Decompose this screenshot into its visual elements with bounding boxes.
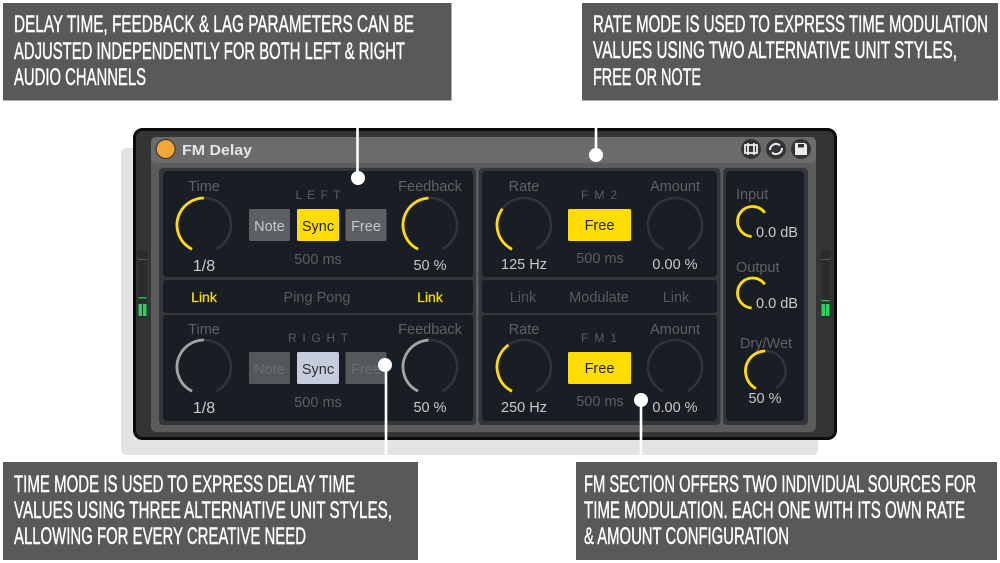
button: Sync active: Sync: [302, 362, 334, 378]
callout: delay parameters: DELAY TIME, FEEDBACK & LAG PARAMETERS CAN BE: [14, 11, 414, 38]
modulation section backing: [478, 168, 720, 425]
heading: FM 2: F M 2: [581, 188, 617, 202]
callout: time mode: TIME MODE IS USED TO EXPRESS DELAY TIME: [14, 471, 355, 498]
knob: FM 1 rate: [488, 331, 560, 403]
device frame: [134, 130, 836, 438]
heading: FM 1: F M 1: [581, 331, 617, 345]
button: Note dimmed: [249, 352, 290, 384]
device name: FM Delay: [182, 142, 253, 159]
meter: right output: [821, 250, 830, 318]
knob: FM 2 rate: [488, 189, 560, 261]
button: Free: [568, 352, 631, 384]
icon: refresh: [766, 139, 786, 159]
leader line: time mode: [378, 358, 392, 462]
toggle: Link: Link: [663, 290, 690, 306]
toggle: Link: Link: [510, 290, 537, 306]
leader line: delay parameters: [351, 100, 365, 185]
delay section backing: [159, 168, 476, 425]
leader line: FM section: [634, 393, 648, 462]
button: Free: [346, 209, 386, 241]
callout: rate mode: [582, 3, 998, 100]
callout: time mode: [3, 462, 418, 560]
toggle: Link: Link: [417, 289, 444, 305]
icon: save: [791, 139, 811, 159]
label: Input: Input: [736, 187, 768, 203]
button: Free: Free: [585, 218, 614, 234]
toggle: Ping Pong: Ping Pong: [284, 290, 350, 306]
knob: dry/wet: [738, 344, 793, 398]
button: Sync: [297, 209, 339, 241]
button: Free: [568, 209, 631, 241]
button: Note: [249, 209, 290, 241]
device drop shadow: [121, 148, 818, 455]
readout: 500 ms: 500 ms: [576, 394, 624, 410]
device body: [151, 137, 816, 432]
label: Dry/Wet: Dry/Wet: [740, 336, 792, 352]
value: left feedback: 50 %: [413, 258, 447, 274]
toggle: Modulate: Modulate: [569, 290, 629, 306]
label: Feedback: Feedback: [398, 322, 463, 338]
button: Note: Note: [254, 219, 285, 235]
value: FM 1 amount: 0.00 %: [652, 400, 698, 416]
output section backing: [723, 168, 808, 425]
value: FM 1 rate: 250 Hz: [501, 400, 547, 416]
heading: RIGHT: R I G H T: [288, 331, 349, 345]
panel: FM 1: [482, 315, 717, 421]
knob: FM 2 amount: [639, 189, 711, 261]
panel: right delay channel: [163, 315, 473, 421]
callout: time mode: VALUES USING THREE ALTERNATIVE UNIT STYLES,: [14, 497, 392, 524]
button: Free dimmed: [346, 352, 386, 384]
readout: 500 ms: 500 ms: [294, 252, 342, 268]
callout: FM section: & AMOUNT CONFIGURATION: [584, 523, 789, 550]
panel: link row left: [163, 280, 473, 313]
meter: left output: [138, 250, 147, 318]
callout: delay parameters: [3, 3, 452, 100]
heading: LEFT: L E F T: [296, 188, 341, 202]
icon: power button: [156, 140, 175, 158]
callout: FM section: [576, 462, 997, 560]
label: Amount: Amount: [650, 322, 700, 338]
knob: input: [736, 205, 769, 238]
callout: delay parameters: AUDIO CHANNELS: [14, 64, 146, 91]
button: Free: Free: [351, 219, 381, 235]
icon: hot-swap: [741, 139, 761, 159]
label: Time: Time: [188, 179, 220, 195]
button: Free dimmed: Free: [351, 362, 381, 378]
button: Sync: Sync: [302, 219, 334, 235]
callout: delay parameters: ADJUSTED INDEPENDENTLY FOR BOTH LEFT & RIGHT: [14, 38, 405, 65]
leader line: rate mode: [589, 100, 603, 162]
value: dry/wet: 50 %: [748, 391, 782, 407]
readout: 500 ms: 500 ms: [576, 251, 624, 267]
label: Feedback: Feedback: [398, 179, 463, 195]
panel: left delay channel: [163, 171, 473, 277]
title bar: [151, 137, 816, 163]
device: FM Delay plugin: [134, 130, 836, 438]
value: output: 0.0 dB: [756, 296, 798, 312]
knob: right time: [168, 331, 240, 403]
value: left time: 1/8: [193, 258, 215, 275]
value: input: 0.0 dB: [756, 225, 798, 241]
panel: output controls: [726, 171, 804, 421]
toggle: Link: Link: [191, 289, 218, 305]
panel: FM 2: [482, 171, 717, 277]
knob: left time: [168, 189, 240, 261]
label: Rate: Rate: [509, 322, 539, 338]
readout: 500 ms: 500 ms: [294, 395, 342, 411]
panel: modulate link row: [482, 280, 717, 313]
callout: rate mode: FREE OR NOTE: [593, 64, 701, 91]
button: Note dimmed: Note: [254, 362, 285, 378]
label: Amount: Amount: [650, 179, 700, 195]
knob: left feedback: [394, 189, 466, 261]
value: FM 2 amount: 0.00 %: [652, 257, 698, 273]
button: Free: Free: [585, 361, 614, 377]
label: Time: Time: [188, 322, 220, 338]
value: FM 2 rate: 125 Hz: [501, 257, 547, 273]
label: Output: Output: [736, 260, 780, 276]
label: Rate: Rate: [509, 179, 539, 195]
button: Sync active: [297, 352, 339, 384]
knob: output: [736, 277, 769, 309]
callout: time mode: ALLOWING FOR EVERY CREATIVE NEED: [14, 523, 306, 550]
knob: right feedback: [394, 331, 466, 403]
knob: FM 1 amount: [639, 331, 711, 403]
value: right time: 1/8: [193, 400, 215, 417]
value: right feedback: 50 %: [413, 400, 447, 416]
